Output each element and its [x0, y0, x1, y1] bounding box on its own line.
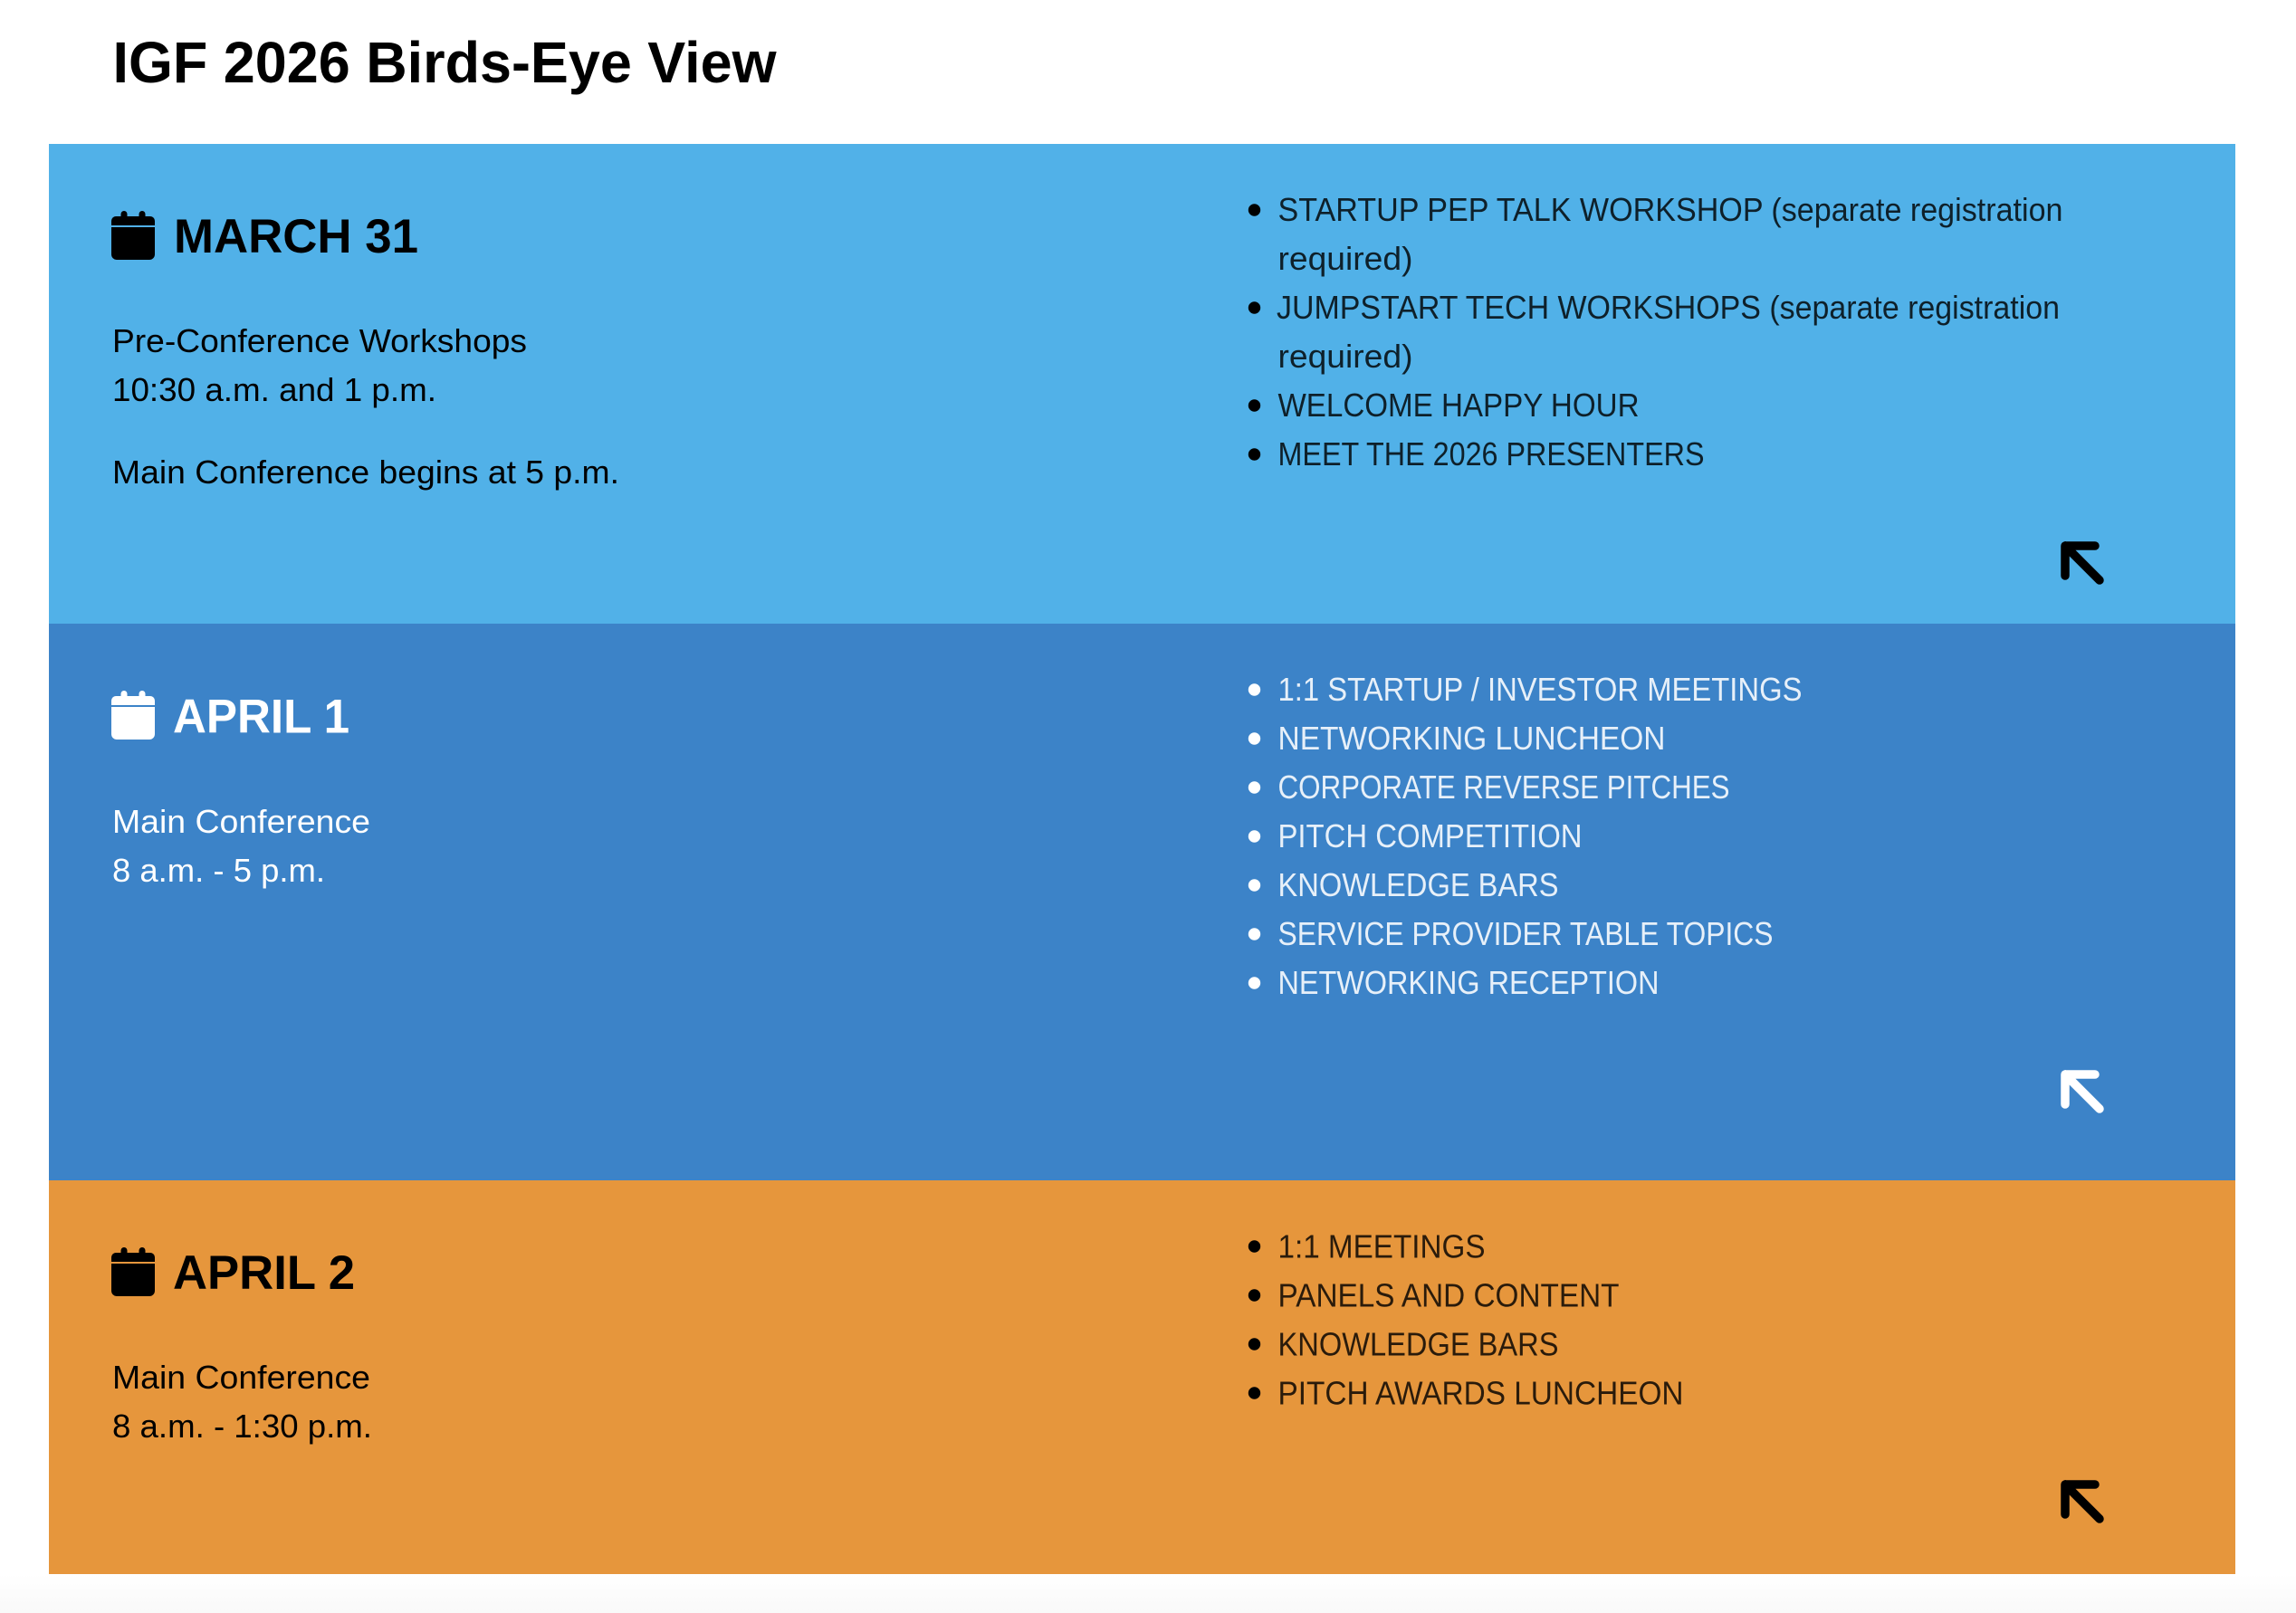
panel: April 2	[49, 1180, 2235, 1574]
text block: April 2 schedule	[112, 1359, 372, 1445]
arrow: back to top March 31	[2065, 546, 2100, 580]
arrow: back to top April 1	[2065, 1074, 2100, 1109]
list: April 2 activities: KNOWLEDGE BARS	[1278, 1325, 1559, 1363]
panel: April 1	[49, 624, 2235, 1180]
icon: calendar April 2	[111, 1247, 155, 1296]
list: April 1 activities: 1:1 STARTUP / INVESTOR MEETINGS	[1278, 671, 1802, 708]
list: April 1 activities: KNOWLEDGE BARS	[1278, 866, 1559, 903]
list: March 31 activities: required)	[1278, 338, 1412, 375]
list: April 2 activities: PANELS AND CONTENT	[1278, 1276, 1619, 1314]
text block: April 1 schedule	[112, 803, 370, 889]
heading: March 31: MARCH 31	[174, 210, 418, 263]
list: March 31 activities: MEET THE 2026 PRESENTERS	[1278, 435, 1704, 472]
list: April 1 activities	[1248, 671, 1802, 1001]
icon: calendar March 31	[111, 211, 155, 260]
icon: calendar April 1	[111, 691, 155, 740]
heading: April 1: APRIL 1	[173, 690, 349, 744]
list: March 31 activities: WELCOME HAPPY HOUR	[1278, 387, 1639, 424]
list: April 1 activities: NETWORKING RECEPTION	[1278, 964, 1659, 1001]
text block: March 31 schedule: Pre-Conference Workshops	[112, 322, 527, 359]
title: IGF 2026 Birds-Eye View	[112, 30, 777, 95]
list: March 31 activities: required)	[1278, 240, 1412, 277]
list: April 1 activities: SERVICE PROVIDER TABLE TOPICS	[1278, 915, 1773, 952]
list: March 31 activities: JUMPSTART TECH WORKSHOPS (separate registration	[1277, 289, 2060, 326]
list: April 2 activities: 1:1 MEETINGS	[1278, 1227, 1485, 1265]
heading: April 2: APRIL 2	[173, 1246, 355, 1300]
text block: April 2 schedule: Main Conference	[112, 1359, 370, 1396]
list: April 1 activities: NETWORKING LUNCHEON	[1278, 720, 1666, 757]
list: April 2 activities: PITCH AWARDS LUNCHEON	[1278, 1374, 1684, 1412]
text block: April 1 schedule: 8 a.m. - 5 p.m.	[112, 852, 325, 889]
list: March 31 activities	[1248, 191, 2062, 472]
arrow: back to top April 2	[2065, 1484, 2100, 1519]
text block: April 2 schedule: 8 a.m. - 1:30 p.m.	[112, 1408, 372, 1445]
list: April 2 activities	[1248, 1227, 1684, 1412]
panel: March 31	[49, 144, 2235, 624]
text block: March 31 schedule: Main Conference begins at 5 p.m.	[112, 453, 619, 491]
text block: April 1 schedule: Main Conference	[112, 803, 370, 840]
list: April 1 activities: CORPORATE REVERSE PITCHES	[1278, 768, 1729, 806]
text block: March 31 schedule	[112, 322, 619, 491]
list: March 31 activities: STARTUP PEP TALK WORKSHOP (separate registration	[1278, 191, 2062, 228]
text block: March 31 schedule: 10:30 a.m. and 1 p.m.	[112, 371, 436, 408]
list: April 1 activities: PITCH COMPETITION	[1278, 817, 1583, 854]
